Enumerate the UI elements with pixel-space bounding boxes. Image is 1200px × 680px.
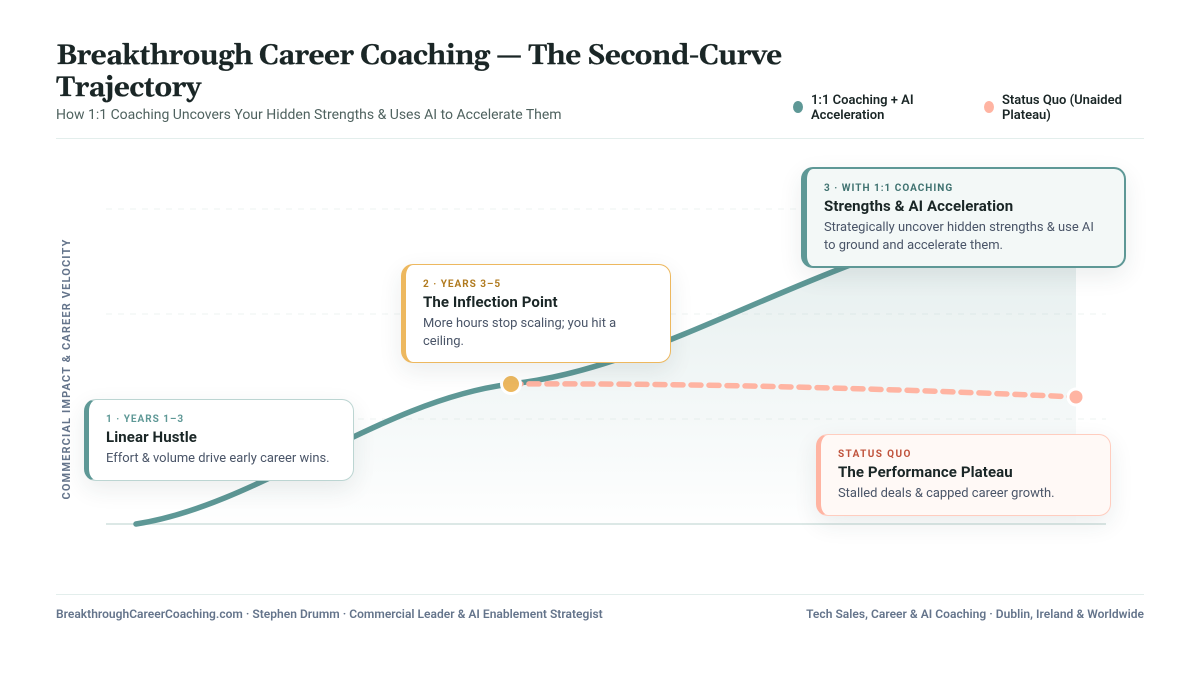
- card 4: performance plateau: [816, 434, 1111, 516]
- footer right: Tech Sales, Career & AI Coaching · Dublin, Ireland & Worldwide: [806, 607, 1144, 621]
- card 3 text: to ground and accelerate them.: [824, 238, 1003, 253]
- card 3: strengths and AI acceleration: [801, 167, 1126, 268]
- card 2: inflection point: [401, 264, 671, 363]
- card 1 label: 1 · YEARS 1–3: [106, 414, 184, 425]
- card 4 text: Stalled deals & capped career growth.: [838, 486, 1055, 501]
- subtitle: How 1:1 Coaching Uncovers Your Hidden Strengths & Uses AI to Accelerate Them: [56, 106, 562, 122]
- legend item: coaching: [793, 93, 914, 123]
- title: Breakthrough Career Coaching — The Second-Curve Trajectory: [56, 38, 782, 106]
- legend item: coaching: Acceleration: [811, 108, 884, 123]
- baseline: [106, 523, 1106, 525]
- footer left: BreakthroughCareerCoaching.com · Stephen Drumm · Commercial Leader & AI Enablement Strategist: [56, 607, 603, 621]
- card 4 heading: The Performance Plateau: [838, 463, 1013, 481]
- card 3 label: 3 · WITH 1:1 COACHING: [824, 183, 953, 194]
- card 3 text: [824, 220, 1094, 253]
- card 2 text: More hours stop scaling; you hit a: [423, 316, 616, 331]
- area under growth curve: [136, 170, 1076, 524]
- legend: [793, 93, 1122, 123]
- card 2 text: [423, 316, 616, 349]
- card 4 label: STATUS QUO: [838, 449, 912, 460]
- card 3 text: Strategically uncover hidden strengths & use AI: [824, 220, 1094, 235]
- legend item: status quo: [984, 93, 1122, 123]
- inflection marker: [502, 374, 520, 394]
- card 2 text: ceiling.: [423, 334, 464, 349]
- plateau dashed line: [511, 384, 1076, 397]
- y axis label: COMMERCIAL IMPACT & CAREER VELOCITY: [60, 238, 73, 500]
- legend item: status quo: Plateau): [1002, 108, 1051, 123]
- card 2 label: 2 · YEARS 3–5: [423, 279, 501, 290]
- card 3 heading: Strengths & AI Acceleration: [824, 197, 1013, 215]
- card 1 text: Effort & volume drive early career wins.: [106, 451, 330, 466]
- legend item: coaching: 1:1 Coaching + AI: [811, 93, 914, 108]
- card 1 heading: Linear Hustle: [106, 428, 197, 446]
- plateau end marker: [1068, 389, 1084, 405]
- card 2 heading: The Inflection Point: [423, 293, 558, 311]
- legend item: status quo: Status Quo (Unaided: [1002, 93, 1122, 108]
- card 1: linear hustle: [84, 399, 354, 481]
- growth curve: [136, 170, 1076, 524]
